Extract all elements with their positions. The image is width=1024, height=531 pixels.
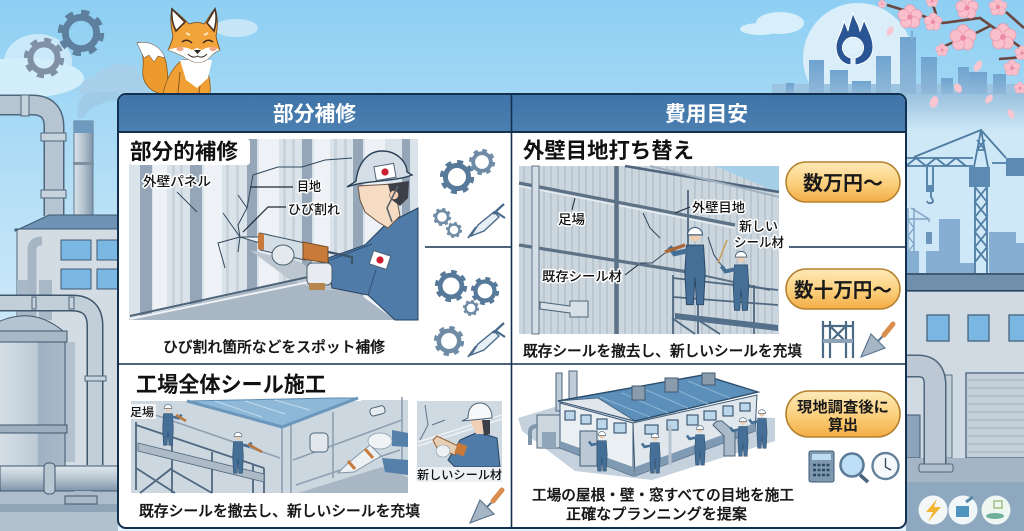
callout: existing sealant xyxy=(542,265,638,284)
inset label: 新しいシール材 xyxy=(417,467,502,482)
shutter xyxy=(966,373,1024,458)
icon: calculator xyxy=(809,451,834,482)
illustration: factory xyxy=(518,371,775,480)
pale moon disk xyxy=(803,3,913,113)
callout: joint xyxy=(250,179,321,194)
back pipes xyxy=(0,297,106,465)
ground xyxy=(0,490,118,531)
lower city haze xyxy=(772,93,1024,133)
ground right xyxy=(906,458,1024,482)
main card xyxy=(118,94,906,528)
hands and sealant gun xyxy=(338,430,408,475)
worker xyxy=(328,151,418,320)
caption line 1 and 2 xyxy=(532,486,794,523)
icon: lightning xyxy=(918,496,948,524)
workers xyxy=(665,227,749,310)
background factory right xyxy=(906,273,1024,531)
heading: partial repair: 部分補修 xyxy=(273,103,356,126)
caption: 既存シールを撤去し、新しいシールを充填 xyxy=(523,342,802,360)
icon: factory and signal xyxy=(948,496,978,524)
background gears top left xyxy=(26,13,101,76)
tank shadow xyxy=(65,342,75,462)
price pill: after survey xyxy=(786,391,900,437)
price pill: hundreds of thousands: 数十万円〜 xyxy=(794,279,892,302)
right pipe xyxy=(906,366,953,472)
icon: clock xyxy=(872,453,898,479)
heading: cost estimate: 費用目安 xyxy=(665,103,748,126)
callout: exterior panel: 外壁パネル xyxy=(143,174,211,189)
logo: flame xyxy=(836,13,873,65)
background clouds xyxy=(0,12,804,98)
callout: crack xyxy=(243,202,340,232)
icon: trowel xyxy=(470,490,502,523)
cherry blossoms xyxy=(878,0,1024,120)
caption line 1 and 2: 工場の屋根・壁・窓すべての目地を施工 xyxy=(532,486,794,504)
callout: exterior panel xyxy=(143,174,211,212)
body xyxy=(163,60,210,94)
illustration: scaffold and workers xyxy=(519,166,779,334)
big pipe xyxy=(0,463,118,504)
callout: exterior joint: 外壁目地 xyxy=(692,200,745,215)
duct xyxy=(540,301,588,317)
fox mascot xyxy=(137,9,220,94)
chimney xyxy=(73,121,94,217)
price pill: after survey: 算出 xyxy=(828,416,858,434)
smoke xyxy=(78,92,118,118)
callout: scaffold xyxy=(558,198,585,227)
tank xyxy=(0,316,67,466)
panel: whole factory cost xyxy=(518,371,900,523)
scaffold platform xyxy=(672,272,778,334)
illustration: wall and scaffold xyxy=(131,397,408,493)
windows xyxy=(927,315,1024,341)
icon: eco plant xyxy=(982,496,1010,524)
callout: new sealant: 新しい xyxy=(739,219,778,234)
price pill: after survey: 現地調査後に xyxy=(797,398,889,416)
caption: ひび割れ箇所などをスポット補修 xyxy=(163,338,385,356)
building xyxy=(15,215,118,469)
callout: new sealant xyxy=(734,219,784,250)
price pill: tens of thousands xyxy=(786,162,900,202)
panel title: 部分的補修 xyxy=(130,140,238,164)
illustration: worker sealing a crack xyxy=(129,139,418,320)
caption: 既存シールを撤去し、新しいシールを充填 xyxy=(139,502,420,520)
panel: whole factory sealing xyxy=(130,373,502,523)
price pill: tens of thousands: 数万円〜 xyxy=(803,172,883,195)
tail xyxy=(137,42,168,94)
callout: scaffold: 足場 xyxy=(130,406,155,419)
callout: joint: 目地 xyxy=(297,179,321,194)
grid lines xyxy=(118,95,906,528)
callout: scaffold: 足場 xyxy=(558,212,585,227)
background crane and city right xyxy=(906,130,1024,275)
top pipe xyxy=(0,95,66,216)
caption line 1 and 2: 正確なプランニングを提案 xyxy=(566,506,747,523)
panel title: 工場全体シール施工 xyxy=(136,373,326,397)
icon: scaffold xyxy=(823,321,853,358)
title background xyxy=(129,139,250,165)
callout: existing sealant: 既存シール材 xyxy=(542,269,622,284)
inset: worker close-up xyxy=(416,401,502,482)
callout: new sealant: シール材 xyxy=(734,235,784,250)
panel: partial repair xyxy=(129,139,505,357)
icon: trowel xyxy=(861,324,893,357)
header bar xyxy=(118,95,906,132)
panel: exterior joint replacement xyxy=(519,139,900,360)
callout: crack: ひび割れ xyxy=(288,202,340,217)
icon group: gears and sealant gun lower xyxy=(436,272,505,357)
icon group: gears and sealant gun xyxy=(434,150,505,238)
caulking gun xyxy=(240,233,352,290)
price pill: hundreds of thousands xyxy=(786,269,900,309)
head xyxy=(168,9,220,62)
city skyline xyxy=(772,31,1024,94)
background factory left xyxy=(0,92,118,531)
panel title: 外壁目地打ち替え xyxy=(523,139,694,163)
bottom right badge icons xyxy=(918,496,1010,524)
icon: magnifier xyxy=(840,454,868,482)
